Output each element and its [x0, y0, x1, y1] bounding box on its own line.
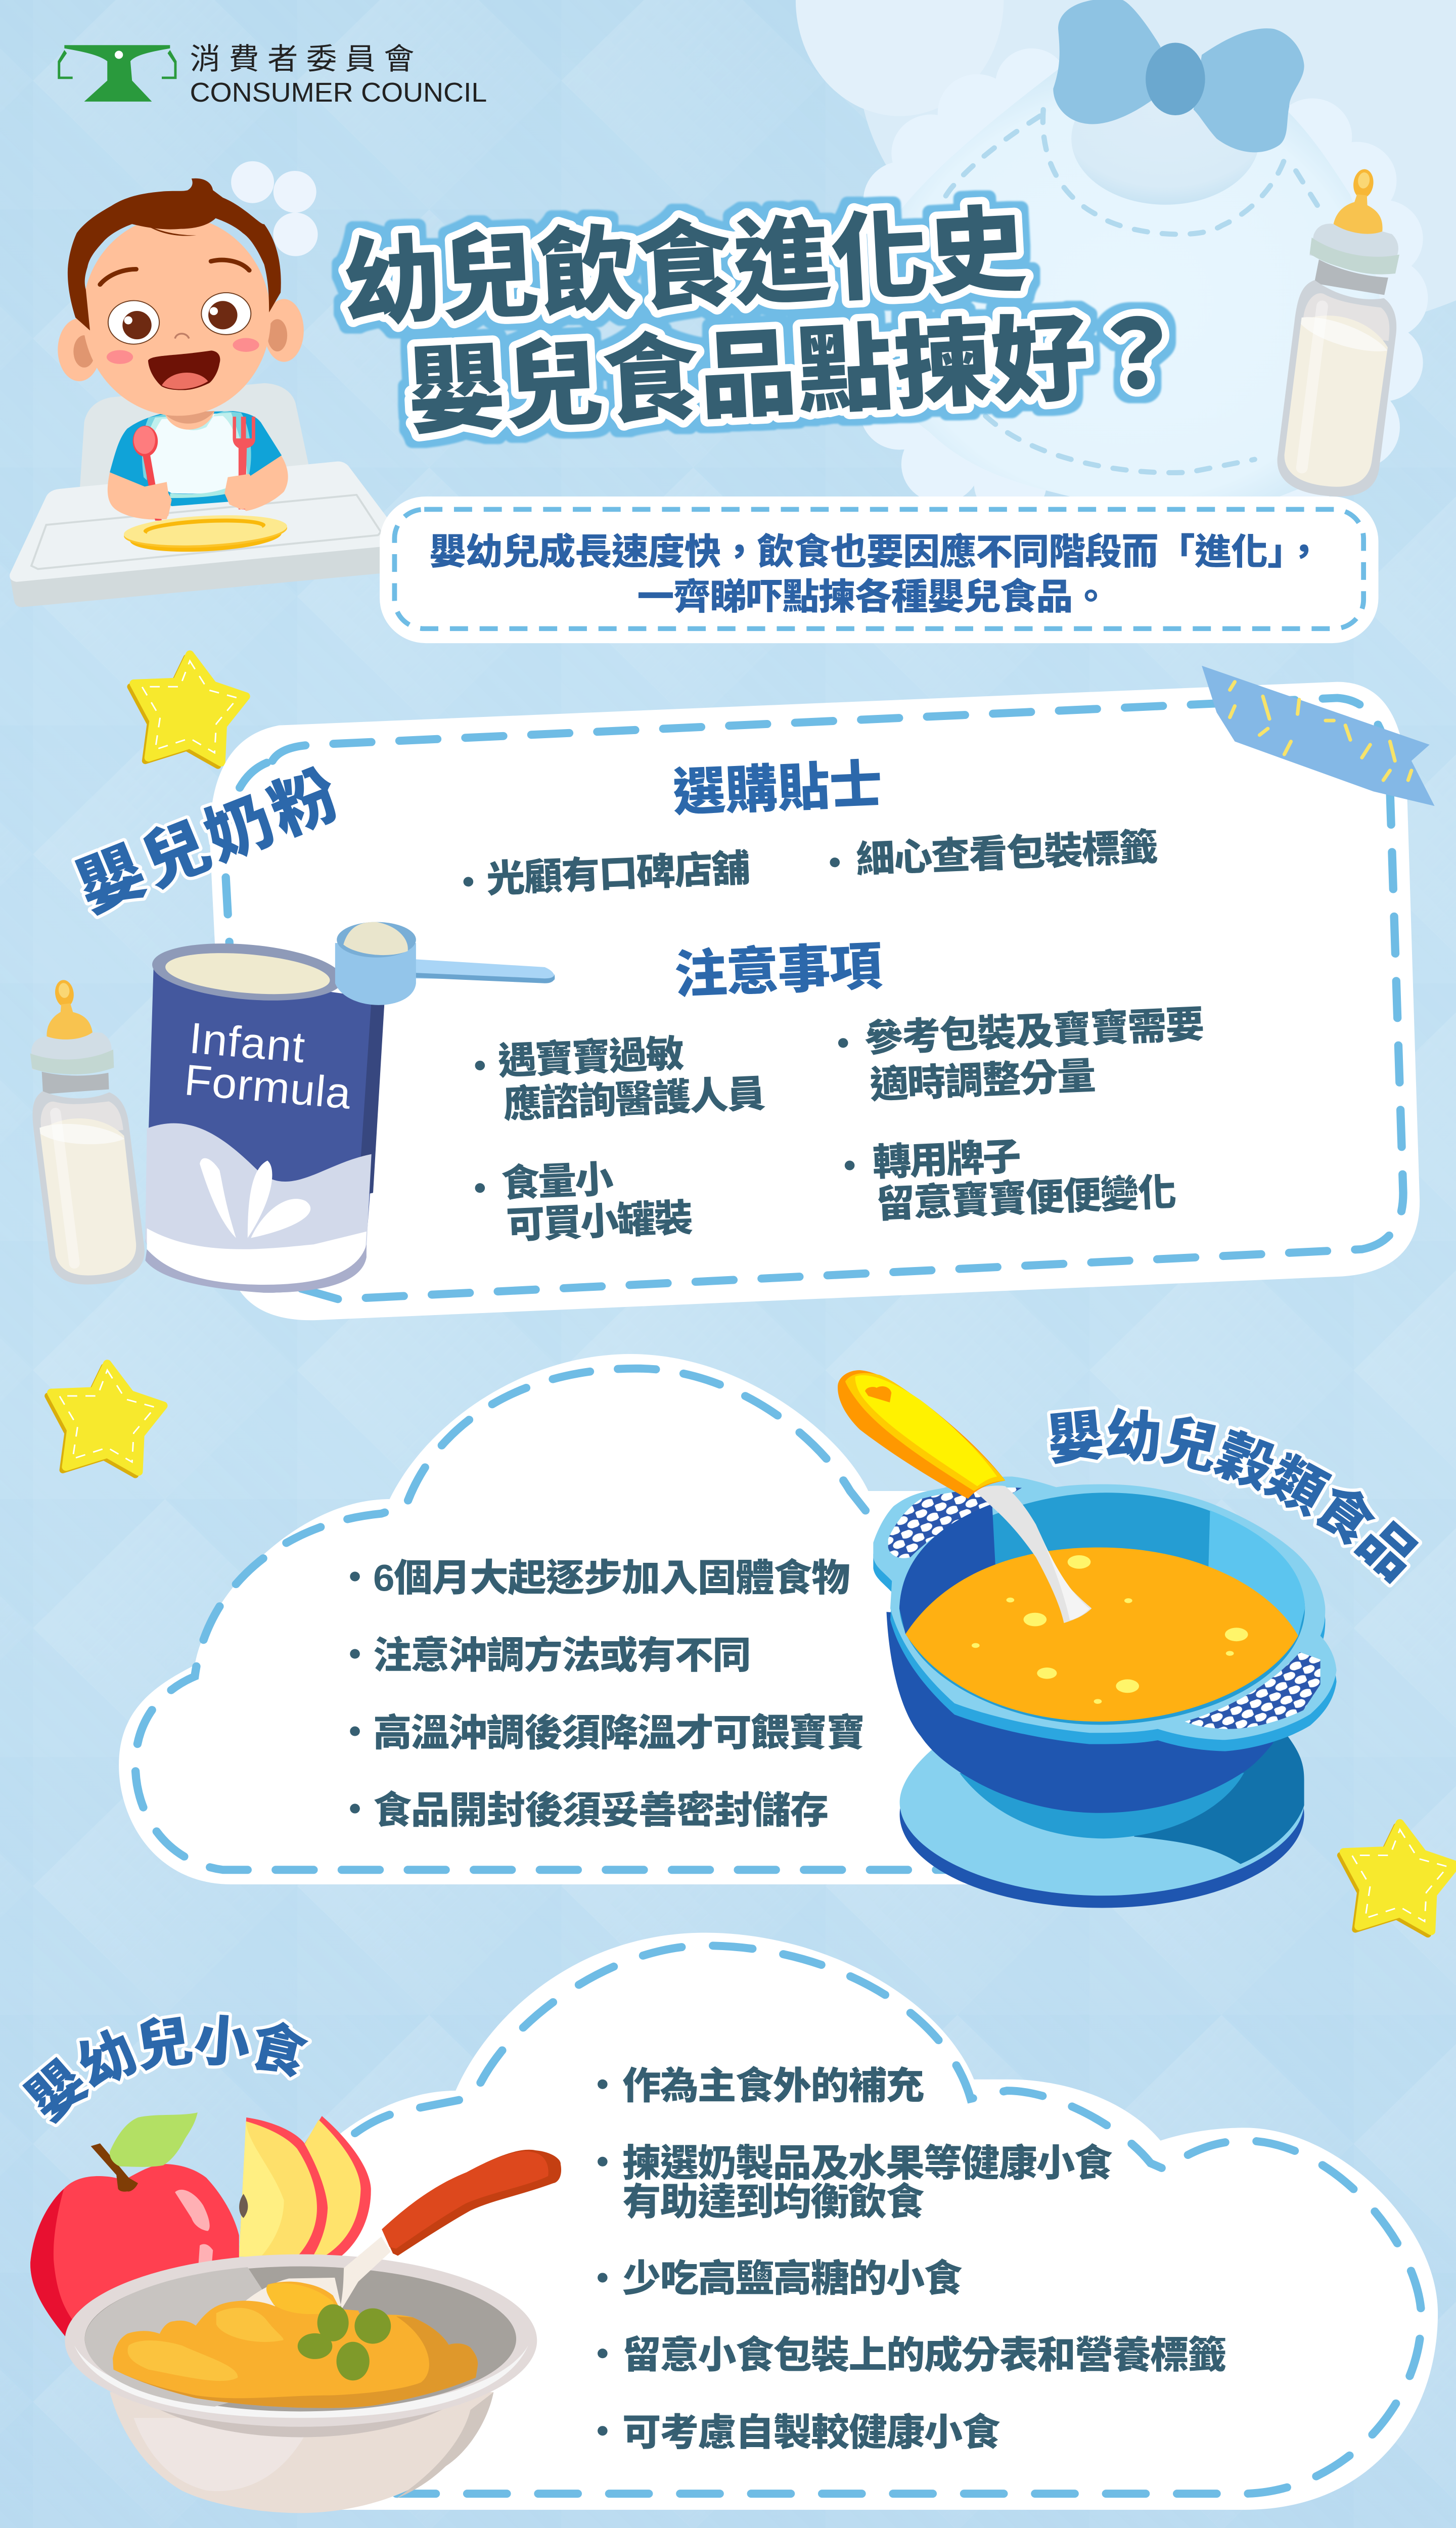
bib scalloped edge — [847, 49, 1428, 519]
bowl inner — [85, 2267, 516, 2411]
head — [58, 178, 304, 424]
heading: tips: 選購貼士 — [671, 755, 884, 822]
cereal bullet 1: 6個月大起逐步加入固體食物 — [373, 1558, 850, 1600]
logo — [58, 42, 487, 108]
apple body — [30, 2164, 239, 2337]
can label: Infant — [188, 1014, 307, 1072]
illustration: snack bowl — [65, 2150, 561, 2513]
heading: infant cereal: 嬰幼兒穀類食品 — [1046, 1405, 1423, 1588]
tip 1: 光顧有口碑店舖 — [485, 847, 751, 900]
tip 2: 細心查看包裝標籤 — [855, 827, 1159, 881]
bowl body — [886, 1612, 1304, 1813]
bib neck opening — [1071, 72, 1259, 205]
panel: infant formula — [210, 682, 1420, 1320]
soup — [905, 1548, 1298, 1722]
tray — [10, 462, 406, 607]
note 4: 留意寶寶便便變化 — [875, 1171, 1177, 1226]
illustration: formula can — [145, 936, 385, 1293]
spoon — [838, 1370, 1091, 1623]
illustration: scoop — [335, 922, 555, 1005]
bowl base — [900, 1717, 1304, 1908]
logo icon — [58, 45, 176, 102]
note 4 — [844, 1130, 1177, 1227]
snack bullet 5: 可考慮自製較健康小食 — [622, 2412, 1000, 2454]
decorative bubbles — [231, 161, 318, 256]
apple slices — [304, 2116, 371, 2256]
note 3: 適時調整分量 — [869, 1055, 1097, 1107]
panel: infant snacks — [313, 1933, 1438, 2510]
apple leaf — [110, 2112, 198, 2167]
star icon — [1340, 1823, 1456, 1934]
plate — [123, 512, 288, 556]
intro text line 1: 嬰幼兒成長速度快，飲食也要因應不同階段而「進化」， — [429, 532, 1323, 572]
title line 2: 嬰兒食品點揀好？ — [405, 300, 1189, 446]
star icon — [48, 1364, 163, 1475]
bowl handle dots top — [888, 1487, 1022, 1558]
intro text line 2: 一齊睇吓點揀各種嬰兒食品。 — [637, 577, 1109, 617]
illustration: baby in high chair — [10, 178, 406, 607]
spoon in bowl — [244, 2150, 561, 2321]
mint leaves — [298, 2304, 391, 2380]
bowl well — [899, 1493, 1305, 1725]
icon: bow — [1053, 0, 1304, 152]
panel: intro — [380, 496, 1379, 643]
snack bullet 2: 有助達到均衡飲食 — [622, 2181, 925, 2223]
heading: notes: 注意事項 — [673, 938, 884, 1004]
cereal bullet 4: 食品開封後須妥善密封儲存 — [373, 1790, 829, 1832]
snack bullet 3: 少吃高鹽高糖的小食 — [622, 2258, 963, 2300]
title — [340, 197, 1189, 446]
bowl rim — [873, 1476, 1337, 1740]
star icon — [130, 654, 246, 765]
soup bubbles — [972, 1555, 1248, 1704]
shirt and bib — [110, 411, 282, 506]
note 2: 食量小 — [500, 1158, 614, 1205]
cereal bullet 3: 高溫沖調後須降溫才可餵寶寶 — [373, 1712, 865, 1754]
bowl body — [110, 2392, 493, 2513]
illustration: cereal bowl — [838, 1370, 1337, 1908]
chair back — [77, 383, 325, 522]
note 1 — [474, 1029, 766, 1127]
cereal bullet 2: 注意沖調方法或有不同 — [373, 1635, 751, 1677]
note 2 — [474, 1155, 694, 1248]
note 3 — [837, 1004, 1207, 1108]
arms — [108, 455, 288, 520]
logo chinese name: 消費者委員會 — [190, 42, 415, 76]
bib stitching — [929, 110, 1319, 473]
note 4: 轉用牌子 — [872, 1136, 1022, 1184]
can label: Formula — [183, 1056, 353, 1118]
panel: infant cereal — [119, 1354, 990, 1884]
illustration: apple and slices — [30, 2112, 371, 2337]
can label — [183, 1014, 353, 1118]
note 3: 參考包裝及寶寶需要 — [863, 1004, 1205, 1060]
snack bullet 2: 揀選奶製品及水果等健康小食 — [622, 2143, 1113, 2185]
snack bullet 2 — [598, 2143, 1113, 2223]
spoon and fork — [133, 417, 255, 521]
note 1: 遇寶寶過敏 — [497, 1033, 685, 1083]
snack bullet 4: 留意小食包裝上的成分表和營養標籤 — [622, 2334, 1226, 2376]
logo english name: CONSUMER COUNCIL — [190, 76, 487, 108]
illustration: milk bottle left — [16, 974, 148, 1289]
note 1: 應諮詢醫護人員 — [503, 1073, 766, 1126]
decorative tape — [1202, 666, 1435, 806]
food — [113, 2282, 478, 2408]
snack bullet 1: 作為主食外的補充 — [622, 2065, 925, 2107]
hands — [141, 474, 256, 519]
decorative bib — [796, 0, 1456, 519]
bowl rim — [65, 2254, 537, 2427]
bowl rim underside — [873, 1488, 1337, 1751]
note 2: 可買小罐裝 — [506, 1197, 694, 1247]
illustration: milk bottle right — [1273, 163, 1416, 502]
title line 1: 幼兒飲食進化史 — [340, 197, 1029, 338]
heading: infant formula: 嬰兒奶粉 — [67, 758, 349, 925]
heading: infant snacks: 嬰幼兒小食 — [19, 2011, 312, 2128]
bib body — [874, 57, 1386, 500]
bowl handle dots bottom — [1185, 1652, 1321, 1729]
apple stem — [91, 2143, 138, 2192]
